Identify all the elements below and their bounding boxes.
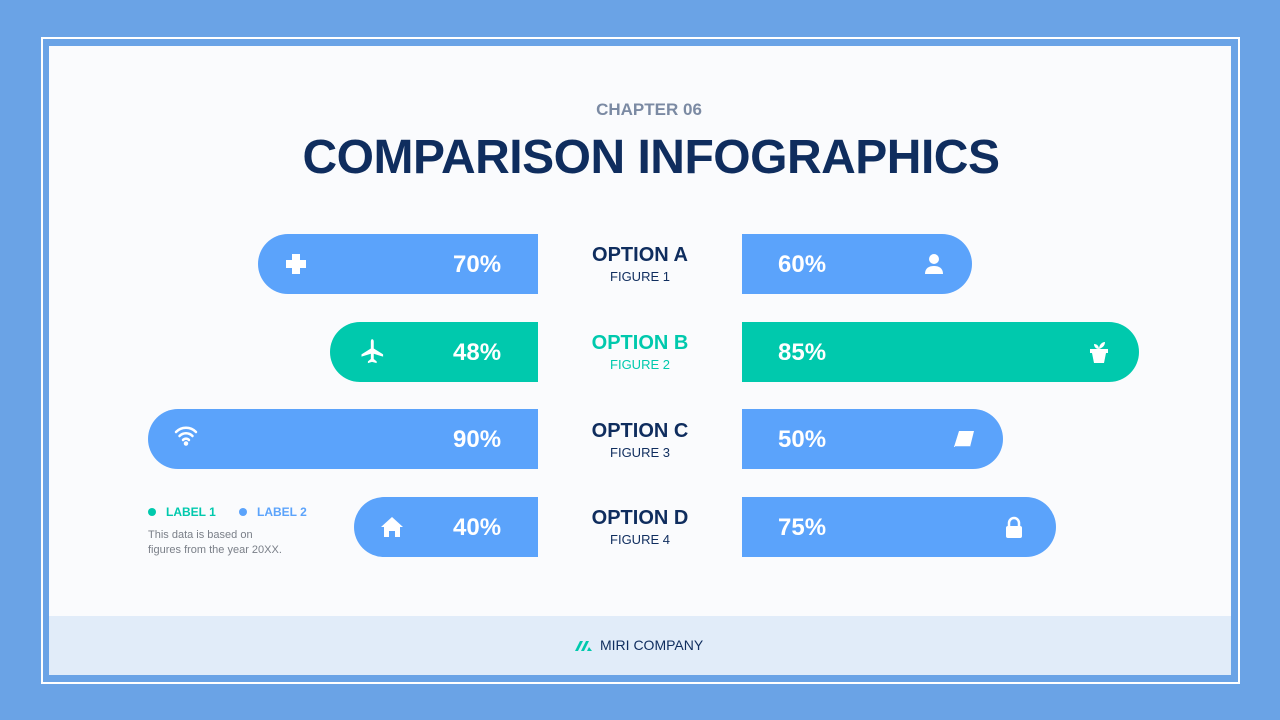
bar: option B left xyxy=(330,322,538,382)
bar: option D right: 75% xyxy=(778,514,826,541)
option A label: FIGURE 1 xyxy=(610,269,670,284)
option A label xyxy=(592,244,688,284)
option D label: FIGURE 4 xyxy=(610,532,670,547)
bar: option D right xyxy=(742,497,1056,557)
icon: lock xyxy=(1006,516,1022,538)
bar: option B left: 48% xyxy=(453,339,501,366)
icon: home xyxy=(381,517,403,537)
option B label: FIGURE 2 xyxy=(610,357,670,372)
footer logo: MIRI COMPANY xyxy=(600,637,703,653)
bar: option B right xyxy=(742,322,1139,382)
bar: option D left xyxy=(354,497,538,557)
icon: book xyxy=(954,431,974,447)
legend item: label 2: LABEL 2 xyxy=(257,505,307,519)
bar: option D left: 40% xyxy=(453,514,501,541)
option B label xyxy=(592,332,688,372)
icon: plus xyxy=(286,254,306,274)
bar: option C left: 90% xyxy=(453,426,501,453)
note text xyxy=(148,529,282,556)
icon: wifi xyxy=(174,426,198,446)
bar: option C left xyxy=(148,409,538,469)
bar: option B right: 85% xyxy=(778,339,826,366)
icon: plant pot xyxy=(1090,342,1108,363)
option C label: OPTION C xyxy=(592,420,688,442)
icon: logo xyxy=(575,641,592,651)
icon: person xyxy=(925,254,943,274)
bar: option C right: 50% xyxy=(778,426,826,453)
option D label: OPTION D xyxy=(592,507,688,529)
title: COMPARISON INFOGRAPHICS xyxy=(303,131,999,184)
note text: figures from the year 20XX. xyxy=(148,544,282,556)
bar: option A right: 60% xyxy=(778,251,826,278)
chapter label: CHAPTER 06 xyxy=(596,100,702,119)
bar: option A right xyxy=(742,234,972,294)
option B label: OPTION B xyxy=(592,332,688,354)
bar: option C right xyxy=(742,409,1003,469)
option C label xyxy=(592,420,688,460)
icon: plane xyxy=(362,339,384,364)
legend item: label 1: LABEL 1 xyxy=(166,505,216,519)
footer band xyxy=(49,616,1231,675)
option D label xyxy=(592,507,688,547)
bar: option A left: 70% xyxy=(453,251,501,278)
note text: This data is based on xyxy=(148,529,253,541)
bar: option A left xyxy=(258,234,538,294)
option C label: FIGURE 3 xyxy=(610,445,670,460)
option A label: OPTION A xyxy=(592,244,688,266)
legend xyxy=(148,505,307,556)
